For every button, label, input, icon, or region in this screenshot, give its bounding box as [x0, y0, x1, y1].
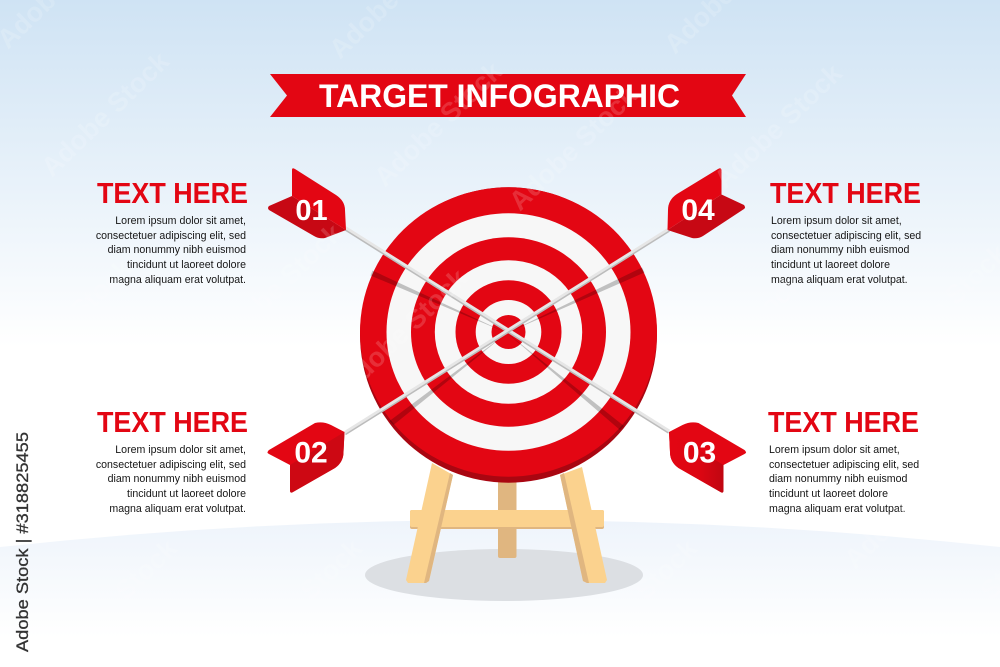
watermark pattern: Adobe Stock [708, 57, 849, 194]
heading 04: TEXT HERE [770, 178, 921, 210]
watermark pattern: Adobe Stock [563, 532, 704, 667]
body 01: diam nonummy nibh euismod [108, 244, 246, 256]
watermark pattern: Adobe Stock [668, 267, 809, 404]
easel shadow [365, 549, 643, 601]
target board [360, 187, 657, 483]
watermark pattern: Adobe Stock [35, 45, 176, 182]
body 04: consectetuer adipiscing elit, sed [771, 230, 921, 242]
ground [0, 520, 1000, 667]
body 04: tincidunt ut laoreet dolore [771, 259, 890, 271]
watermark pattern: Adobe Stock [0, 252, 139, 389]
arrow shadows on target [370, 268, 644, 430]
watermark pattern: Adobe Stock [838, 437, 979, 574]
body 02: consectetuer adipiscing elit, sed [96, 459, 246, 471]
arrow head 01: 01 [295, 195, 328, 227]
body 03: Lorem ipsum dolor sit amet, [769, 444, 900, 456]
text block 01 [96, 178, 248, 286]
body 03: tincidunt ut laoreet dolore [769, 488, 888, 500]
arrow head 02: 02 [294, 436, 328, 470]
watermark pattern: Adobe Stock [43, 532, 184, 667]
body 03: consectetuer adipiscing elit, sed [769, 459, 919, 471]
heading 01: TEXT HERE [97, 178, 248, 210]
heading 03: TEXT HERE [768, 407, 919, 439]
text block 03 [768, 407, 919, 515]
body 04 [771, 215, 921, 286]
arrow shaft 02 to 04 [345, 230, 670, 434]
arrow head 04: 04 [681, 194, 715, 227]
watermark pattern: Adobe Stock [368, 55, 509, 192]
body 02 [96, 444, 246, 515]
body 01: magna aliquam erat volutpat. [109, 274, 246, 286]
body 03: diam nonummy nibh euismod [769, 473, 907, 485]
body 04: magna aliquam erat volutpat. [771, 274, 908, 286]
body 02: Lorem ipsum dolor sit amet, [115, 444, 246, 456]
body 01: Lorem ipsum dolor sit amet, [115, 215, 246, 227]
watermark pattern: Adobe Stock [333, 262, 474, 399]
body 01 [96, 215, 246, 286]
arrow head 01 [268, 168, 346, 238]
text block 04 [770, 178, 921, 286]
body 04: diam nonummy nibh euismod [771, 244, 909, 256]
watermark pattern: Adobe Stock [228, 532, 369, 667]
body 04: Lorem ipsum dolor sit amet, [771, 215, 902, 227]
stock id label: Adobe Stock | #318825455 [13, 432, 32, 652]
arrow head 03 [669, 422, 746, 493]
easel [406, 463, 607, 583]
body 02: diam nonummy nibh euismod [108, 473, 246, 485]
body 02: tincidunt ut laoreet dolore [127, 488, 246, 500]
heading 02: TEXT HERE [97, 407, 248, 439]
arrow head 02 [268, 422, 344, 493]
body 01: tincidunt ut laoreet dolore [127, 259, 246, 271]
body 01: consectetuer adipiscing elit, sed [96, 230, 246, 242]
body 03 [769, 444, 919, 515]
arrow shaft 01 to 03 [344, 228, 669, 433]
body 02: magna aliquam erat volutpat. [109, 503, 246, 515]
title banner [270, 74, 746, 117]
body 03: magna aliquam erat volutpat. [769, 503, 906, 515]
title banner: TARGET INFOGRAPHIC [319, 78, 680, 114]
arrow head 03: 03 [683, 436, 716, 470]
arrow head 04 [668, 168, 745, 238]
text block 02 [96, 407, 248, 515]
watermark pattern: Adobe Stock [208, 217, 349, 354]
watermark pattern: Adobe Stock [503, 79, 644, 216]
